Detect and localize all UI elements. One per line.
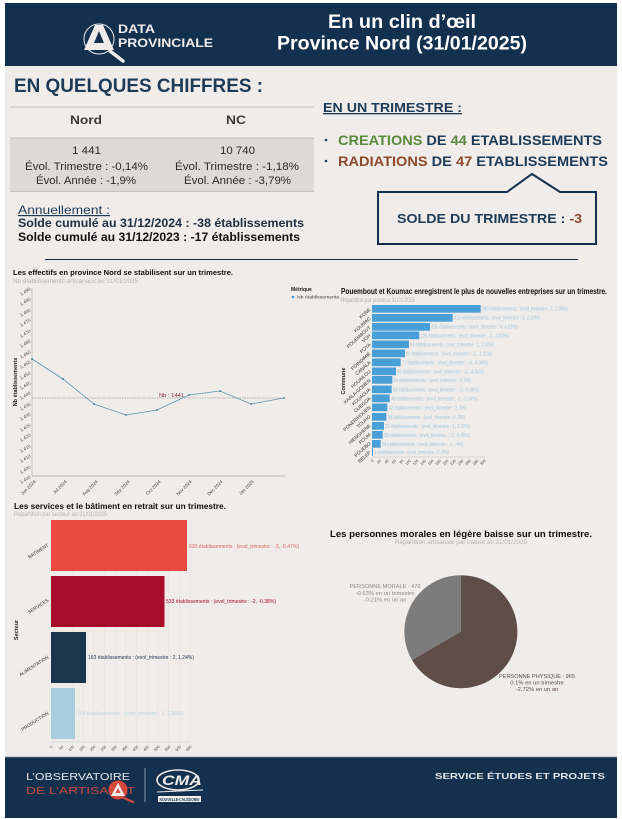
x axis labels: Jan 2025 xyxy=(238,479,255,496)
x axis labels: 300 xyxy=(479,459,487,466)
x axis labels: 220 xyxy=(450,459,457,466)
y axis title: Nb établissements xyxy=(13,358,19,406)
y axis labels: 1,420 xyxy=(19,432,32,443)
x axis labels: 350 xyxy=(121,745,129,752)
y axis labels: 1,475 xyxy=(19,317,32,328)
bar value labels: 42 établissements : (evol_trimestre : 2, 5%) xyxy=(389,405,467,411)
commune labels: HOUAILOU xyxy=(350,369,372,389)
bar value labels: 65 établissements : (evol_trimestre : -3, -4.41%) xyxy=(397,369,484,375)
plaque: nouvelle-caledonie xyxy=(158,795,201,802)
x axis labels: 200 xyxy=(442,459,449,466)
label: personne morale: -0.21% en un an xyxy=(364,598,406,604)
panel: line chart effectifs xyxy=(13,268,340,497)
x axis labels: 450 xyxy=(143,745,150,752)
annual balance xyxy=(18,203,304,244)
footer banner xyxy=(5,757,617,818)
bar: alimentation xyxy=(51,632,86,683)
x axis labels: 300 xyxy=(111,745,118,752)
x axis labels: Aug 2024 xyxy=(81,479,99,497)
column: nc: Évol. Année : -3,79% xyxy=(184,174,291,187)
plaque: nouvelle-caledonie: NOUVELLE-CALÉDONIE xyxy=(160,795,200,802)
x axis labels: Nov 2024 xyxy=(175,479,193,497)
callout: solde du trimestre xyxy=(378,174,596,244)
y axis labels: 1,445 xyxy=(19,380,32,391)
y axis labels: 1,490 xyxy=(19,286,32,297)
value labels: 114 établissements : (evol_trimestre : 1, 1.26%) xyxy=(77,711,183,717)
value labels: 163 établissements : (evol_trimestre : 2, 1.24%) xyxy=(88,655,194,661)
x axis labels: 0 xyxy=(49,745,54,749)
y axis labels: 1,460 xyxy=(19,349,32,360)
radiations line: RADIATIONS DE 47 ETABLISSEMENTS xyxy=(338,154,608,169)
y axis labels: 1,400 xyxy=(19,474,32,485)
y axis title: Secteur xyxy=(14,619,20,640)
x axis labels: 180 xyxy=(435,459,442,466)
sector labels: ALIMENTATION xyxy=(18,655,50,677)
commune labels: BELEP xyxy=(357,450,372,464)
y axis labels: 1,425 xyxy=(19,422,32,433)
label: personne physique: 0.1% en un trimestre xyxy=(510,680,564,686)
commune labels: CANALA xyxy=(354,359,372,376)
commune labels: VOH xyxy=(361,333,372,344)
label: personne physique: PERSONNE PHYSIQUE : 965 xyxy=(499,674,575,680)
x axis labels: 280 xyxy=(472,459,479,466)
x axis labels: Jul 2024 xyxy=(52,479,68,495)
icon: cma logo xyxy=(157,770,203,792)
chart subtitle: Répartition par secteur au 31/01/2025 xyxy=(14,512,108,518)
panel: pie chart personnes xyxy=(330,529,592,693)
y axis labels: 1,480 xyxy=(19,307,32,318)
column: nc: Évol. Trimestre : -1,18% xyxy=(175,160,299,173)
logo text: provinciale: PROVINCIALE xyxy=(118,38,213,50)
column: nc xyxy=(175,113,299,187)
y axis labels: 1,410 xyxy=(19,453,32,464)
y axis labels: 1,440 xyxy=(19,390,32,401)
x axis labels xyxy=(49,745,193,752)
artisanat wordmark: DE L’ARTISANAT xyxy=(26,786,135,797)
commune labels: POUEMBOUT xyxy=(346,325,372,349)
label: personne morale: -0.63% en un trimestre xyxy=(356,591,414,597)
commune labels: POUEBO xyxy=(353,441,372,458)
label: personne morale: PERSONNE MORALE : 476 xyxy=(350,584,420,590)
logo text: data: DATA xyxy=(118,24,155,36)
y axis labels: 1,435 xyxy=(19,401,32,412)
title line 2: Province Nord (31/01/2025) xyxy=(277,34,527,54)
column: nord: Évol. Trimestre : -0,14% xyxy=(25,160,148,173)
icon: data provinciale logo xyxy=(84,24,123,61)
y axis labels: 1,485 xyxy=(19,296,32,307)
heading: en un trimestre: EN UN TRIMESTRE : xyxy=(323,100,462,115)
x axis labels: Sep 2024 xyxy=(113,479,131,497)
x axis labels: Jun 2024 xyxy=(20,479,37,496)
commune labels: KONE xyxy=(358,307,372,320)
panel: en un trimestre xyxy=(323,100,608,244)
y axis labels: 1,455 xyxy=(19,359,32,370)
table band xyxy=(10,138,314,191)
x axis labels: 20 xyxy=(376,459,382,465)
label: personne physique xyxy=(499,674,575,693)
x axis labels: 550 xyxy=(164,745,171,752)
commune labels: HIENGHENE xyxy=(348,423,372,445)
y axis labels xyxy=(19,286,32,485)
column: nc: NC xyxy=(226,113,246,127)
commune labels: KAALA-GOMEN xyxy=(343,378,372,405)
annual balance: Solde cumulé au 31/12/2024 : -38 établissements xyxy=(18,216,304,230)
commune labels: POUM xyxy=(358,432,372,445)
commune labels: POYA xyxy=(359,341,372,354)
icon: magnifier A xyxy=(108,780,133,802)
x axis labels: 200 xyxy=(89,745,97,752)
x axis labels: 150 xyxy=(78,745,86,752)
bar value labels: 38 établissements : (evol_trimestre : 0, 0%) xyxy=(388,415,465,421)
x axis labels xyxy=(370,459,487,466)
value labels xyxy=(77,544,299,717)
sector labels: PRODUCTION xyxy=(20,711,50,732)
column: nord xyxy=(25,113,148,187)
commune labels: TOUHO xyxy=(356,414,372,429)
bar value labels: 28 établissements : (evol_trimestre : -2, -6.45%) xyxy=(384,433,470,439)
commune labels: KOUMAC xyxy=(353,316,372,334)
pie slice: personne physique xyxy=(412,575,517,688)
bar value labels: 126 établissements : (evol_trimestre : -2, -3.82%) xyxy=(421,333,509,339)
x axis labels: 100 xyxy=(405,459,412,466)
bar: batiment xyxy=(51,520,187,571)
legend xyxy=(291,287,340,300)
bar value labels: 90 établissements : (evol_trimestre : -1, -1.11%) xyxy=(406,351,492,357)
y axis title: Commune xyxy=(341,368,347,394)
column: nord: Évol. Année : -1,9% xyxy=(36,174,136,187)
label: personne physique: -2.72% en un an xyxy=(516,687,558,693)
commune labels xyxy=(342,307,372,464)
bar: production xyxy=(51,688,75,739)
y axis labels: 1,405 xyxy=(19,464,32,475)
column: nc: 10 740 xyxy=(220,145,255,157)
bar value labels: 54 établissements : (evol_trimestre : 0, 0%) xyxy=(393,378,472,384)
bar value labels: 290 établissements : (evol_trimestre : 3, 1.05%) xyxy=(482,307,568,313)
column: nord: Nord xyxy=(70,113,102,127)
label: personne morale xyxy=(350,584,420,604)
sector labels: SERVICES xyxy=(27,598,50,615)
y axis labels: 1,430 xyxy=(19,411,32,422)
data line xyxy=(31,358,285,416)
x axis labels: 100 xyxy=(68,745,75,752)
x axis labels: 650 xyxy=(185,745,193,752)
legend: Métrique xyxy=(291,287,312,293)
x axis labels: 240 xyxy=(457,459,464,466)
y axis labels: 1,470 xyxy=(19,328,32,339)
commune labels: POINDIMIE xyxy=(350,351,372,371)
bar value labels: 53 établissements : (evol_trimestre : -3, -5.36%) xyxy=(393,387,479,393)
x axis labels: 60 xyxy=(391,459,397,465)
x axis labels: 140 xyxy=(420,459,427,466)
bar value labels: 155 établissements : (evol_trimestre : 6, 4.03%) xyxy=(431,325,518,331)
y axis labels: 1,415 xyxy=(19,443,32,454)
x axis labels xyxy=(20,479,255,497)
panel: bar chart communes xyxy=(341,287,607,466)
sector labels xyxy=(18,543,50,732)
chart title: Les services et le bâtiment en retrait sur un trimestre. xyxy=(14,501,226,511)
reference label: Nb : 1441 xyxy=(159,393,184,399)
panel: bar chart secteurs xyxy=(14,501,299,752)
y axis labels: 1,465 xyxy=(19,338,32,349)
title line 1: En un clin d’œil xyxy=(328,12,476,33)
icon: cma logo: CMA xyxy=(162,772,202,788)
bar value labels: 48 établissements : (evol_trimestre : -1, -2.04%) xyxy=(391,396,477,402)
chart subtitle: Répartition par province 31/01/2025 xyxy=(341,298,416,304)
y axis labels: 1,450 xyxy=(19,370,32,381)
commune labels: OUEGOA xyxy=(353,395,372,414)
bar value labels: 1 établissements : (evol_trimestre : 0, 0%) xyxy=(374,450,449,456)
bar: services xyxy=(51,576,164,627)
heading: en quelques chiffres: EN QUELQUES CHIFFRES : xyxy=(14,76,263,97)
service label: SERVICE ÉTUDES ET PROJETS xyxy=(435,771,605,781)
header banner xyxy=(5,3,617,66)
annual balance: Annuellement : xyxy=(18,203,110,217)
chart title: Les effectifs en province Nord se stabilisent sur un trimestre. xyxy=(13,268,233,277)
bar value labels: 77 établissements : (evol_trimestre : -4, -4.94%) xyxy=(402,360,488,366)
callout: solde du trimestre: SOLDE DU TRIMESTRE : -3 xyxy=(397,211,582,226)
annual balance: Solde cumulé au 31/12/2023 : -17 établissements xyxy=(18,230,300,244)
x axis labels: 120 xyxy=(412,459,420,466)
value labels: 533 établissements : (evol_trimestre : -2, -0.38%) xyxy=(166,599,276,605)
creations line: CREATIONS DE 44 ETABLISSEMENTS xyxy=(338,133,602,148)
panel: en quelques chiffres xyxy=(10,76,314,244)
bar value labels: 99 établissements : (evol_trimestre : 1, 1.02%) xyxy=(410,342,494,348)
bar value labels: 32 établissements : (evol_trimestre : 1, 3.23%) xyxy=(385,424,470,430)
value labels: 630 établissements : (evol_trimestre : -3, -0.47%) xyxy=(189,544,299,550)
x axis labels: 40 xyxy=(384,459,390,465)
x axis labels: 400 xyxy=(132,745,139,752)
x axis labels: Oct 2024 xyxy=(145,479,162,496)
bar value labels: 24 établissements : (evol_trimestre : -1, -4%) xyxy=(382,442,464,448)
commune labels: PONERIHOUEN xyxy=(342,405,372,432)
x axis labels: 600 xyxy=(175,745,182,752)
chart subtitle: Répartition artisanale par nature au 31/01/2025 xyxy=(395,540,528,546)
chart title: Les personnes morales en légère baisse sur un trimestre. xyxy=(330,529,592,540)
bar value labels: 215 établissements : (evol_trimestre : 5, 2.37%) xyxy=(454,316,540,322)
column: nord: 1 441 xyxy=(72,145,101,157)
x axis labels: 260 xyxy=(464,459,472,466)
sector labels: BATIMENT xyxy=(27,543,50,560)
commune labels: KOUAOUA xyxy=(351,386,372,406)
pie slice: personne morale xyxy=(404,575,461,660)
x axis labels: 160 xyxy=(427,459,435,466)
bars xyxy=(372,305,481,456)
reference line xyxy=(32,397,284,399)
x axis labels: 500 xyxy=(153,745,161,752)
bar value labels xyxy=(374,307,568,456)
chart subtitle: Nb établissements artisanaux au 31/01/2025 xyxy=(13,279,139,285)
x axis labels: 250 xyxy=(100,745,107,752)
x axis labels: 80 xyxy=(399,459,405,465)
x axis labels: 50 xyxy=(59,745,64,751)
observatoire wordmark: L’OBSERVATOIRE xyxy=(26,772,130,783)
x axis labels: 0 xyxy=(370,459,375,463)
legend: Nb établissements xyxy=(297,294,340,300)
x axis labels: Dec 2024 xyxy=(206,479,224,497)
